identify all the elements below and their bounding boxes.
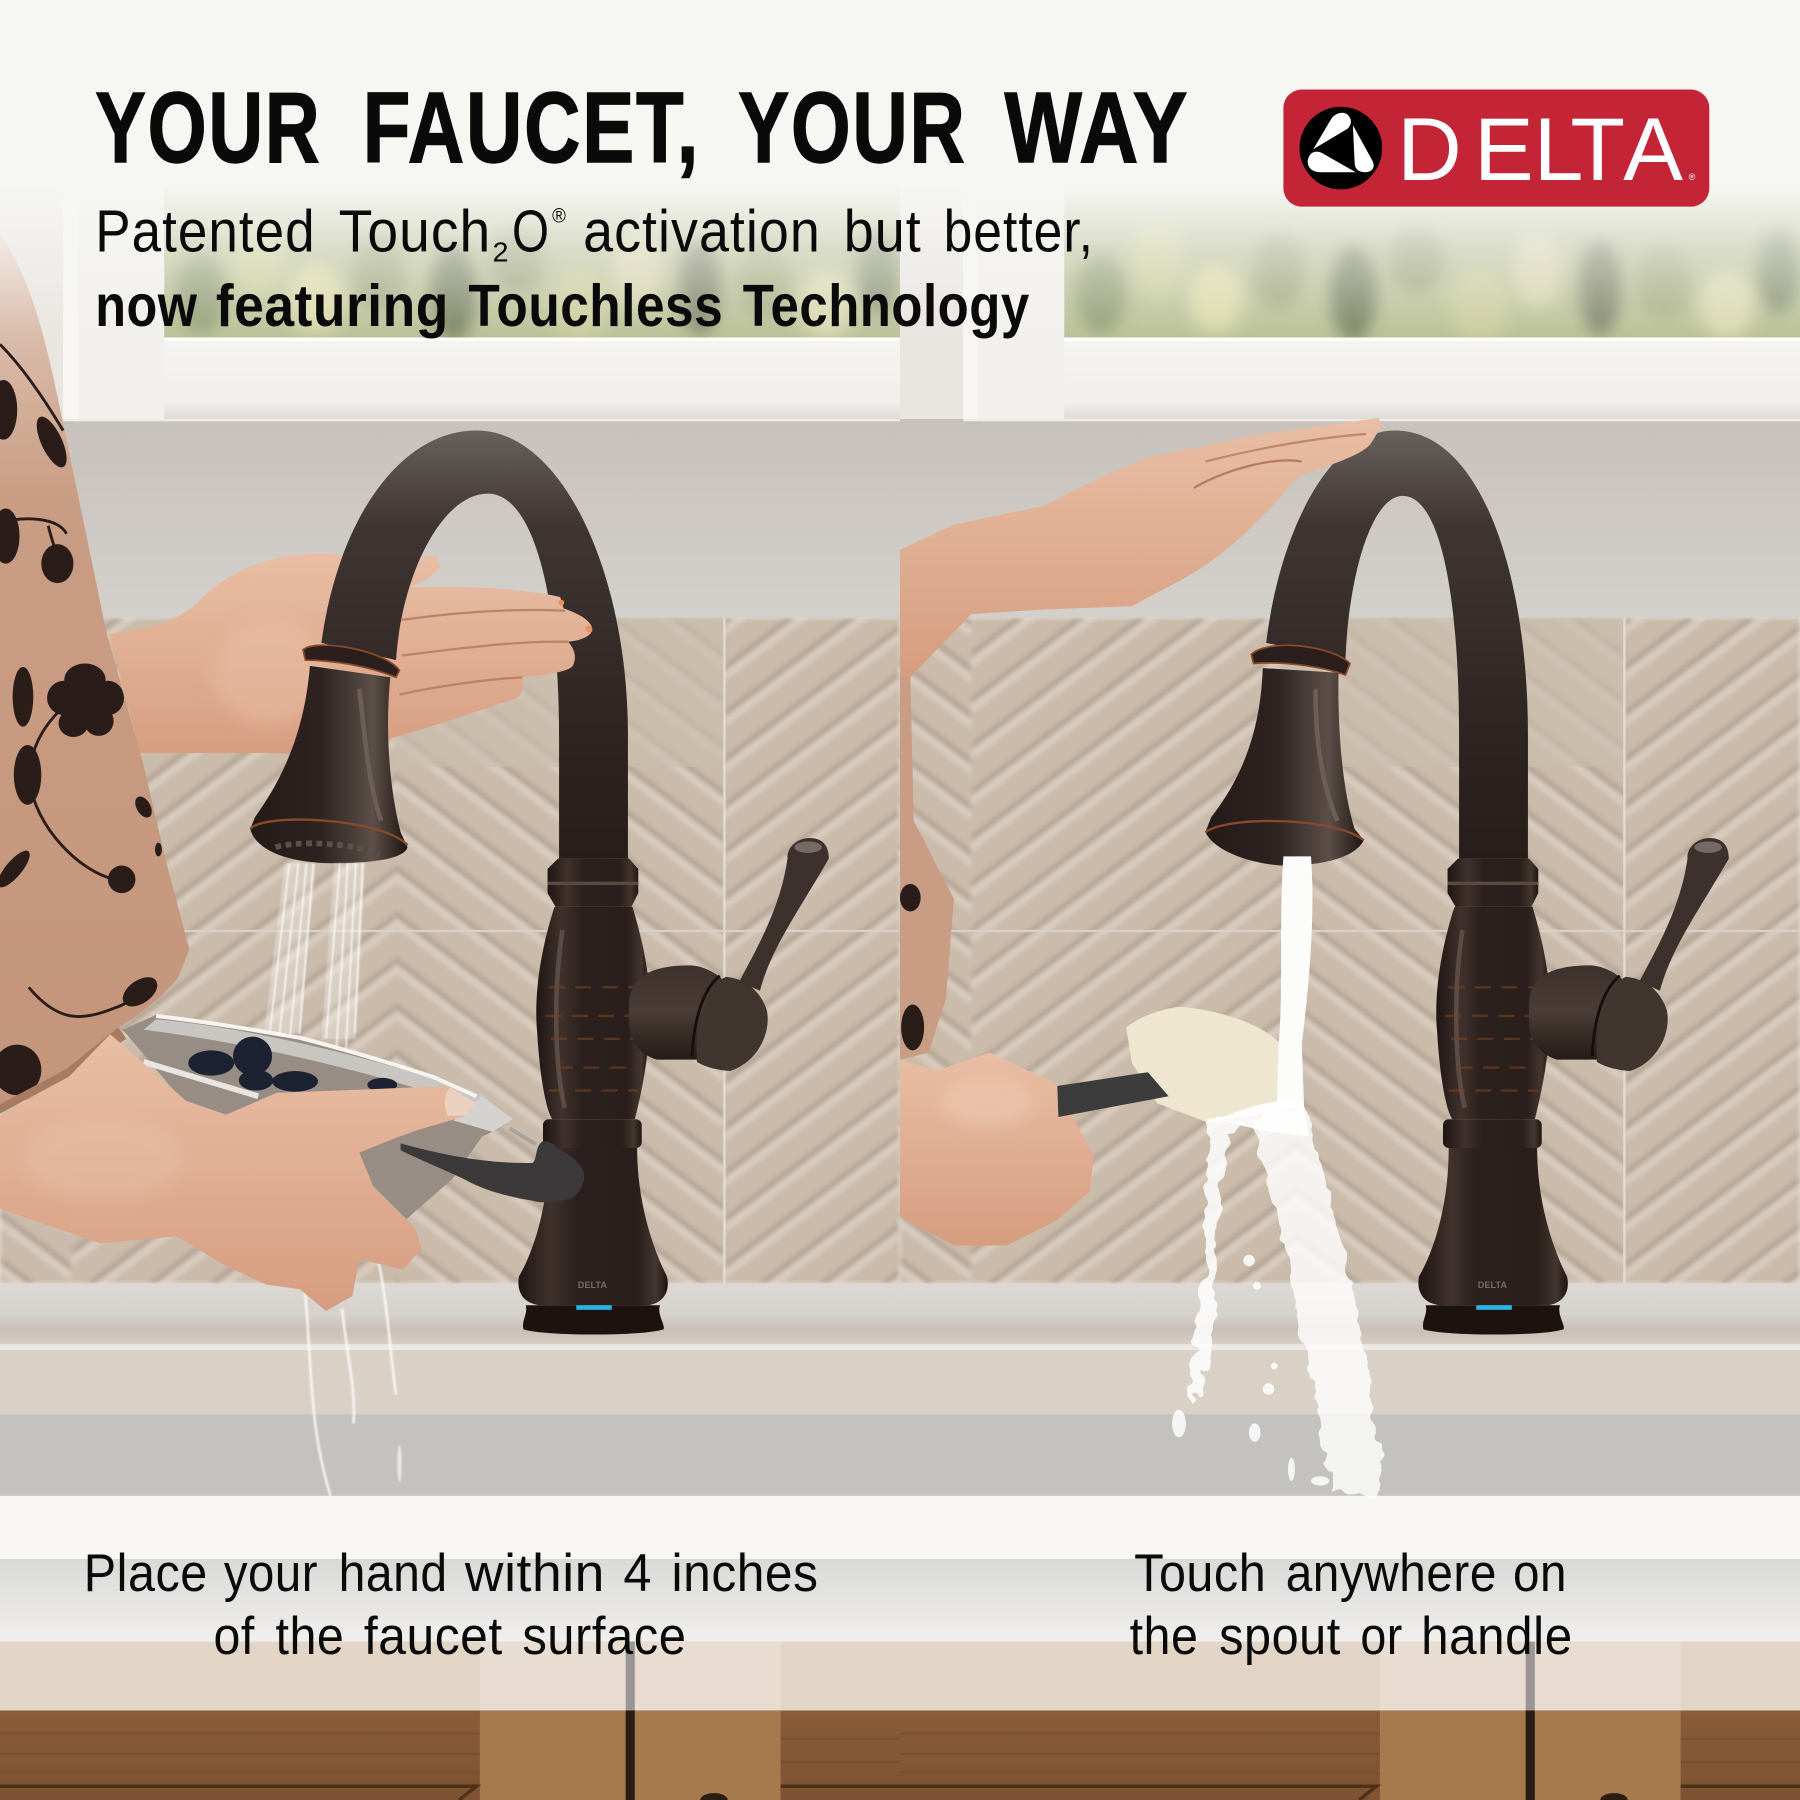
caption: right panel: the: [1130, 1607, 1198, 1666]
subtitle line one: Touch: [339, 197, 491, 264]
spout arm in front of palm: [321, 433, 454, 660]
caption: left panel: faucet: [364, 1607, 503, 1666]
hand: holding colander: [0, 1034, 476, 1311]
caption: left panel: of: [214, 1607, 255, 1666]
title: FAUCET,: [363, 73, 700, 184]
subtitle line two: featuring: [216, 272, 449, 339]
subtitle line two: [95, 272, 1030, 339]
subtitle line two: now: [95, 272, 197, 339]
caption: right panel: spout: [1219, 1607, 1341, 1666]
caption: right panel: on: [1513, 1544, 1567, 1603]
colander handle: [401, 1141, 584, 1202]
subtitle line one: but: [844, 197, 922, 264]
water spray: [264, 863, 402, 1496]
caption: left panel: within: [464, 1544, 605, 1603]
hand: touching spout: [900, 418, 1381, 677]
subtitle line two: Touchless: [468, 272, 723, 339]
caption: left panel: hand: [339, 1544, 448, 1603]
kitchen background right: [900, 0, 1800, 1800]
sleeve: floral blouse: [0, 234, 189, 1114]
spout: touched by hand: [1266, 430, 1528, 859]
logo: Delta: ®: [1689, 172, 1696, 182]
dough on spatula: [1126, 1007, 1299, 1124]
subtitle line one: 2: [492, 237, 510, 268]
subtitle line one: O: [512, 197, 550, 264]
subtitle line two: Technology: [743, 272, 1030, 339]
caption: right panel: or: [1360, 1607, 1403, 1666]
subtitle line one: [95, 197, 1094, 268]
panel: touch activation scene: [900, 0, 1800, 1800]
logo: Delta: [1283, 90, 1709, 207]
spray head: [250, 645, 408, 863]
sleeve remnant: [900, 666, 954, 1060]
colander with blueberries: [123, 1015, 536, 1219]
hand: hovering near spout: [109, 554, 592, 758]
caption: right panel: Touch: [1134, 1544, 1266, 1603]
caption: left panel: the: [276, 1607, 344, 1666]
title: [95, 73, 1189, 184]
title: WAY: [1004, 73, 1189, 184]
caption: left panel: your: [224, 1544, 318, 1603]
logo: Delta: DELTA: [1397, 99, 1683, 199]
hand: gripping spatula: [900, 1053, 1094, 1246]
caption: left panel: [84, 1544, 818, 1666]
spray head right: [1205, 645, 1364, 866]
caption: right panel: anywhere: [1286, 1544, 1497, 1603]
icon: Delta triangle mark: [1299, 107, 1382, 189]
caption: left panel: Place: [84, 1544, 208, 1603]
caption: left panel: 4: [623, 1544, 652, 1603]
subtitle line one: better,: [944, 197, 1094, 264]
caption: left panel: surface: [522, 1607, 686, 1666]
caption: right panel: handle: [1421, 1607, 1573, 1666]
title: YOUR: [738, 73, 967, 184]
panel: proximity activation scene: [0, 198, 901, 1800]
faucet body and handle right: [1418, 838, 1729, 1335]
subtitle line one: ®: [552, 205, 566, 228]
spout: pulled-out gooseneck: [321, 430, 628, 859]
spatula handle: [1057, 1072, 1169, 1117]
caption: left panel: inches: [672, 1544, 818, 1603]
caption: right panel: [1130, 1544, 1573, 1666]
title: YOUR: [95, 73, 321, 184]
water stream: [1172, 856, 1382, 1492]
subtitle line one: Patented: [95, 197, 316, 264]
faucet body and handle: [518, 838, 829, 1335]
kitchen background left: [0, 0, 900, 1800]
subtitle line one: activation: [583, 197, 821, 264]
